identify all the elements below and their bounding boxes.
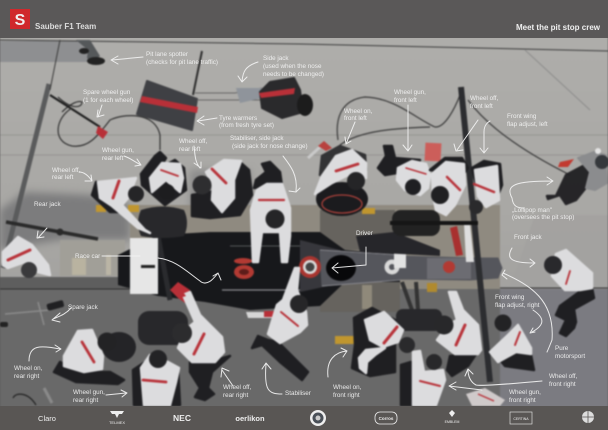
footer bar <box>0 406 608 430</box>
crew: wheel on, front right <box>352 308 415 376</box>
heading: Meet the pit stop crew <box>516 23 601 32</box>
label: wheel on, front left: Wheel on, <box>344 108 372 115</box>
spare jack <box>0 300 64 327</box>
logo: Sauber: S <box>15 12 26 29</box>
crew: wheel gun, rear left <box>141 152 186 205</box>
label: wheel off, front right: front right <box>549 381 576 388</box>
crew: rear jack <box>3 237 50 278</box>
label: wheel off, rear right: Wheel off, <box>223 384 251 391</box>
label: side jack: Side jack <box>263 55 289 62</box>
arrows <box>29 56 553 397</box>
label: spare jack: Spare jack <box>68 304 99 311</box>
stray gear, lower left <box>13 388 52 405</box>
label: tyre warmers: (from fresh tyre set) <box>219 122 274 129</box>
crew: wheel gun, front left <box>378 146 430 195</box>
label: front wing flap adjust, right: Front wing <box>495 294 524 301</box>
sponsor: Chelsea crest <box>310 410 326 426</box>
crew: wheel on, front left <box>315 146 366 194</box>
crew: wheel on, rear left <box>192 160 252 218</box>
crew: front wing flap adjust, left <box>469 161 502 214</box>
label: side jack: (used when the nose <box>263 63 322 70</box>
label: stabiliser, side jack: Stabiliser, side jack <box>230 135 284 142</box>
hoses <box>337 95 570 175</box>
label: wheel on, front right: Wheel on, <box>333 384 361 391</box>
label: wheel off, rear right: rear right <box>223 392 248 399</box>
label: race car: Race car <box>75 253 100 260</box>
sponsor: emblem: EMBLEM <box>445 420 459 424</box>
crew: stabiliser, side jack <box>251 162 290 262</box>
label: wheel off, front left: Wheel off, <box>470 95 498 102</box>
logo: Sauber <box>10 9 30 29</box>
sponsor logos <box>38 410 594 426</box>
crew: wheel off, front right <box>434 292 481 376</box>
left pole and gantry <box>3 40 160 268</box>
label: wheel on, front left: front left <box>344 115 367 122</box>
race car <box>118 224 502 318</box>
sponsor: Telmex <box>109 411 125 425</box>
sponsor: Corsa <box>375 412 397 424</box>
label: front wing flap adjust, left: Front wing <box>507 113 536 120</box>
label: front jack: Front jack <box>514 234 542 241</box>
red box <box>425 143 441 161</box>
crew: front wing flap adjust, right <box>490 314 534 370</box>
label: pure motorsport: Pure <box>555 345 568 352</box>
crew: wheel off, rear left <box>92 178 150 233</box>
crew: wheel on, rear right <box>54 330 136 384</box>
label: spare wheel gun: (1 for each wheel) <box>83 97 133 104</box>
label: front wing flap adjust, left: flap adjust, left <box>507 121 548 128</box>
label: side jack: needs to be changed) <box>263 71 324 78</box>
sponsor: Telmex: TELMEX <box>109 420 125 425</box>
crew: wheel off, front left <box>430 158 468 215</box>
sponsor: Claro: Claro <box>38 414 56 423</box>
sponsor: NEC: NEC <box>173 413 191 423</box>
side jack <box>195 78 313 118</box>
label: wheel gun, rear right: Wheel gun, <box>73 389 105 396</box>
wheel gun on ground <box>308 141 332 158</box>
crew: front jack <box>544 250 594 336</box>
label: wheel on, rear right: Wheel on, <box>14 365 42 372</box>
crew: wheel gun, rear right <box>133 350 180 405</box>
label: stabiliser, side jack: (side jack for nose change) <box>232 143 308 150</box>
label: wheel off, rear left, upper: rear left <box>179 146 201 153</box>
label: front wing flap adjust, right: flap adjust, right <box>495 302 540 309</box>
label: stabiliser: Stabiliser <box>285 390 311 397</box>
label: wheel on, rear right: rear right <box>14 373 39 380</box>
right pole and gantry <box>390 87 490 382</box>
label: wheel gun, rear right: rear right <box>73 397 98 404</box>
label: lollipop man: „Lollipop man" <box>512 207 552 214</box>
label: wheel gun, front right: Wheel gun, <box>509 389 541 396</box>
label: wheel gun, front left: front left <box>394 97 417 104</box>
label: wheel off, rear left: rear left <box>52 174 74 181</box>
label: wheel gun, rear left: rear left <box>102 155 124 162</box>
label: pit lane spotter: Pit lane spotter <box>146 51 188 58</box>
label: wheel gun, rear left: Wheel gun, <box>102 147 134 154</box>
label: pure motorsport: motorsport <box>555 353 585 360</box>
label: wheel on, front right: front right <box>333 392 360 399</box>
label: spare wheel gun: Spare wheel gun <box>83 89 130 96</box>
tyre warmers <box>137 51 202 130</box>
label: lollipop man: (oversees the pit stop) <box>512 214 574 221</box>
sponsor: emblem <box>445 410 459 424</box>
label: wheel off, front left: front left <box>470 103 493 110</box>
crew: wheel off, rear right <box>172 287 230 400</box>
label: wheel gun, front right: front right <box>509 397 536 404</box>
label: wheel off, rear left, upper: Wheel off, <box>179 138 207 145</box>
label: rear jack: Rear jack <box>34 201 61 208</box>
label: tyre warmers: Tyre warmers <box>219 115 257 122</box>
sponsor: Certina: CERTINA <box>513 417 529 421</box>
label: driver: Driver <box>356 230 373 237</box>
pit lane spotter <box>76 40 105 65</box>
label: wheel off, rear left: Wheel off, <box>52 167 80 174</box>
header bar <box>0 0 608 38</box>
label: wheel off, front right: Wheel off, <box>549 373 577 380</box>
dark lane patches <box>0 192 130 250</box>
crew: wheel gun, front right <box>401 351 505 406</box>
sponsor: Oerlikon: oerlikon <box>235 414 265 423</box>
sponsor: globe <box>582 411 594 423</box>
labels <box>14 51 585 404</box>
label: wheel gun, front left: Wheel gun, <box>394 89 426 96</box>
crew: stabiliser <box>252 268 308 380</box>
label: pit lane spotter: (checks for pit lane traffic) <box>146 59 218 66</box>
crew: lollipop man <box>547 148 608 204</box>
team title: Sauber F1 Team <box>35 22 96 31</box>
tyres <box>138 182 442 345</box>
sponsor: Certina <box>510 412 532 424</box>
sponsor: Corsa: Corros <box>379 416 394 421</box>
